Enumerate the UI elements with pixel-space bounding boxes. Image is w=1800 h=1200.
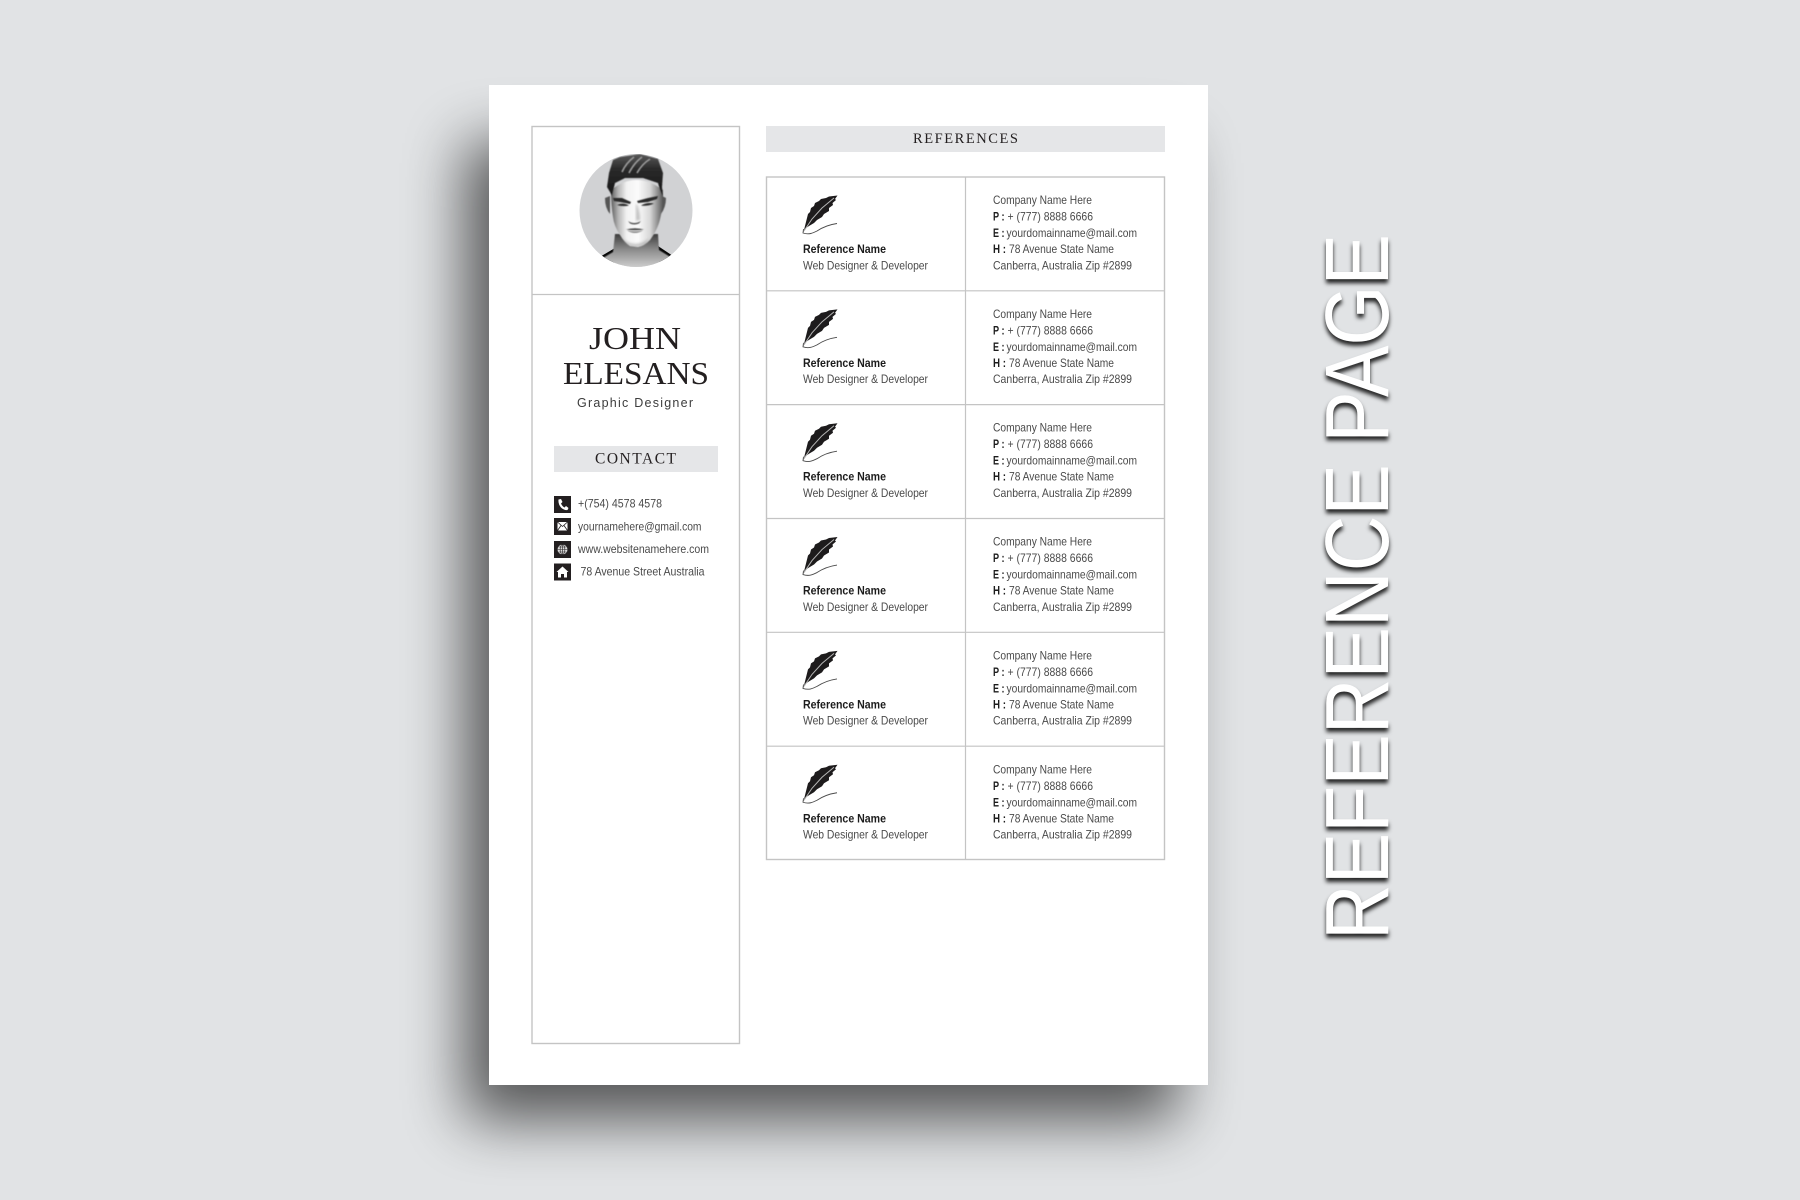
reference row 4: Web Designer & Developer	[803, 600, 928, 614]
icon: phone	[554, 496, 571, 513]
references heading	[766, 126, 1165, 152]
reference row 1: E :	[993, 226, 1004, 240]
reference row 1	[803, 193, 1137, 272]
reference row 3: yourdomainname@mail.com	[1006, 454, 1137, 468]
contact: address	[554, 564, 705, 580]
panel: references table	[766, 177, 1165, 860]
reference row 1: Company Name Here	[993, 193, 1092, 207]
contact: address: 78 Avenue Street Australia	[580, 564, 705, 578]
reference row 5: Company Name Here	[993, 648, 1092, 662]
reference row 1: P :	[993, 210, 1004, 224]
reference row 2	[803, 307, 1137, 386]
reference row 6: H :	[993, 811, 1006, 825]
reference row 5	[803, 648, 1137, 728]
reference row 3: P :	[993, 437, 1004, 451]
contact: email: yournamehere@gmail.com	[578, 520, 702, 534]
icon: globe	[554, 541, 571, 558]
reference row 2: H :	[993, 356, 1006, 370]
neck	[604, 233, 670, 267]
reference row 4	[803, 535, 1137, 614]
reference row 6: yourdomainname@mail.com	[1006, 795, 1137, 809]
icon: quill feather	[803, 196, 838, 234]
reference row 5: 78 Avenue State Name	[1009, 697, 1114, 711]
icon: quill feather	[803, 423, 838, 462]
contact heading: CONTACT	[595, 450, 677, 468]
reference row 5: E :	[993, 681, 1004, 695]
reference row 4: + (777) 8888 6666	[1008, 551, 1093, 565]
eyes	[617, 204, 629, 206]
reference row 3: H :	[993, 470, 1006, 484]
reference row 4: Reference Name	[803, 584, 886, 598]
contact: phone: +(754) 4578 4578	[578, 496, 662, 510]
vertical title: REFERENCE PAGE: REFERENCE PAGE	[1308, 234, 1408, 940]
reference row 5: Web Designer & Developer	[803, 714, 928, 728]
reference row 3: E :	[993, 454, 1004, 468]
contact: email	[554, 518, 702, 535]
name: ELESANS	[563, 355, 709, 391]
reference row 5: P :	[993, 665, 1004, 679]
reference row 4: E :	[993, 568, 1004, 582]
icon: quill feather	[803, 309, 838, 348]
reference row 6: Company Name Here	[993, 762, 1092, 776]
contact: website	[554, 541, 709, 558]
reference row 2: Reference Name	[803, 356, 886, 370]
icon: quill feather	[803, 651, 838, 689]
reference row 5: H :	[993, 697, 1006, 711]
reference row 3: 78 Avenue State Name	[1009, 470, 1114, 484]
reference row 1: 78 Avenue State Name	[1009, 242, 1114, 256]
icon: quill feather	[803, 765, 838, 803]
reference row 2: Company Name Here	[993, 307, 1092, 321]
reference row 1: Web Designer & Developer	[803, 258, 928, 272]
icon: envelope	[554, 518, 571, 535]
reference row 5: Canberra, Australia Zip #2899	[993, 714, 1132, 728]
reference row 5: Reference Name	[803, 697, 886, 711]
reference row 4: Canberra, Australia Zip #2899	[993, 600, 1132, 614]
reference row 2: + (777) 8888 6666	[1008, 323, 1093, 337]
portrait photo	[579, 154, 693, 275]
reference row 2: P :	[993, 323, 1004, 337]
reference row 2: Canberra, Australia Zip #2899	[993, 372, 1132, 386]
reference row 6: Web Designer & Developer	[803, 828, 928, 842]
reference row 6: P :	[993, 779, 1004, 793]
reference row 6: E :	[993, 795, 1004, 809]
reference row 2: yourdomainname@mail.com	[1006, 340, 1137, 354]
job title: Graphic Designer	[577, 396, 693, 410]
name	[563, 320, 709, 391]
reference row 6: Canberra, Australia Zip #2899	[993, 828, 1132, 842]
panel: left sidebar	[532, 126, 740, 1044]
reference row 6: Reference Name	[803, 811, 886, 825]
contact heading	[554, 446, 718, 472]
reference row 1: Reference Name	[803, 242, 886, 256]
reference row 4: 78 Avenue State Name	[1009, 584, 1114, 598]
references heading: REFERENCES	[913, 131, 1018, 147]
reference row 4: Company Name Here	[993, 535, 1092, 549]
face	[611, 180, 663, 247]
nose and lips	[628, 221, 641, 224]
brows	[613, 198, 631, 204]
reference row 2: E :	[993, 340, 1004, 354]
shirt	[602, 248, 614, 262]
reference row 3	[803, 421, 1137, 500]
reference row 2: Web Designer & Developer	[803, 372, 928, 386]
reference row 5: + (777) 8888 6666	[1008, 665, 1093, 679]
reference row 3: + (777) 8888 6666	[1008, 437, 1093, 451]
reference row 3: Reference Name	[803, 470, 886, 484]
name: JOHN	[589, 320, 681, 356]
reference row 6: + (777) 8888 6666	[1008, 779, 1093, 793]
icon: house	[554, 564, 571, 580]
contact: phone	[554, 496, 662, 513]
ears	[605, 196, 610, 214]
hair	[607, 154, 663, 197]
reference row 4: yourdomainname@mail.com	[1006, 568, 1137, 582]
reference row 1: yourdomainname@mail.com	[1006, 226, 1137, 240]
reference row 5: yourdomainname@mail.com	[1006, 681, 1137, 695]
reference row 2: 78 Avenue State Name	[1009, 356, 1114, 370]
reference row 1: + (777) 8888 6666	[1008, 210, 1093, 224]
reference row 4: P :	[993, 551, 1004, 565]
reference row 1: H :	[993, 242, 1006, 256]
reference row 1: Canberra, Australia Zip #2899	[993, 258, 1132, 272]
reference row 6: 78 Avenue State Name	[1009, 811, 1114, 825]
reference row 3: Canberra, Australia Zip #2899	[993, 486, 1132, 500]
reference row 3: Company Name Here	[993, 421, 1092, 435]
icon: quill feather	[803, 537, 838, 575]
reference row 4: H :	[993, 584, 1006, 598]
reference row 6	[803, 762, 1137, 842]
resume page	[489, 85, 1208, 1085]
contact: website: www.websitenamehere.com	[577, 542, 709, 556]
reference row 3: Web Designer & Developer	[803, 486, 928, 500]
